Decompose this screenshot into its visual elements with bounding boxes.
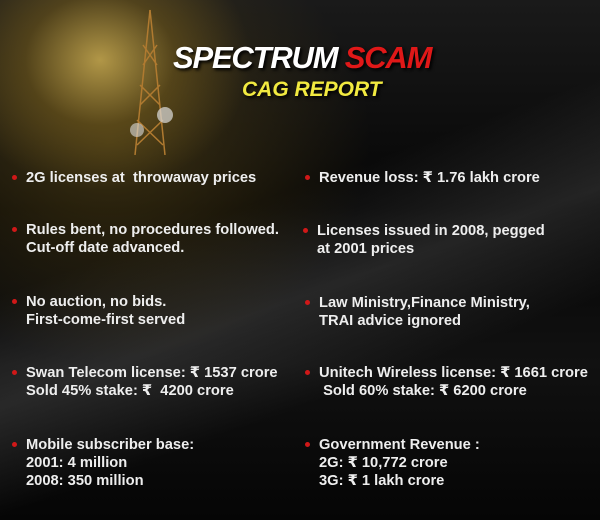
item: 2008 licenses [317, 222, 545, 258]
item: unitech: Sold 60% stake: ₹ 6200 crore [323, 383, 527, 399]
item: revenue loss: Revenue loss: ₹ 1.76 lakh crore [319, 170, 540, 186]
item: govt revenue: 2G: ₹ 10,772 crore [319, 455, 448, 471]
item: 2G: 2G licenses at throwaway prices [26, 170, 256, 186]
item: ministries [319, 294, 530, 330]
item: subscriber [26, 436, 194, 490]
item: subscriber: Mobile subscriber base: [26, 437, 194, 453]
item: swan [26, 364, 278, 400]
item: rules: Cut-off date advanced. [26, 240, 184, 256]
left column [12, 170, 279, 489]
item: subscriber: 2008: 350 million [26, 473, 144, 489]
item: swan: Swan Telecom license: ₹ 1537 crore [26, 365, 278, 381]
right column [303, 170, 588, 489]
item: 2008 licenses: Licenses issued in 2008, pegged [317, 223, 545, 239]
item: auction: First-come-first served [26, 312, 185, 328]
item: auction [26, 293, 185, 329]
item: rules [26, 221, 279, 257]
item: auction: No auction, no bids. [26, 294, 166, 310]
item: ministries: TRAI advice ignored [319, 313, 461, 329]
item: govt revenue: 3G: ₹ 1 lakh crore [319, 473, 444, 489]
title: SPECTRUM SCAM [173, 40, 431, 75]
icon: tower [130, 10, 173, 155]
item: govt revenue: Government Revenue : [319, 437, 480, 453]
item: 2008 licenses: at 2001 prices [317, 241, 414, 257]
item: ministries: Law Ministry,Finance Ministry, [319, 295, 530, 311]
item: unitech [319, 364, 588, 400]
item: swan: Sold 45% stake: ₹ 4200 crore [26, 383, 234, 399]
item: govt revenue [319, 436, 480, 490]
item: subscriber: 2001: 4 million [26, 455, 127, 471]
item: unitech: Unitech Wireless license: ₹ 1661 crore [319, 365, 588, 381]
subtitle: CAG REPORT [242, 78, 382, 101]
item: rules: Rules bent, no procedures followed. [26, 222, 279, 238]
